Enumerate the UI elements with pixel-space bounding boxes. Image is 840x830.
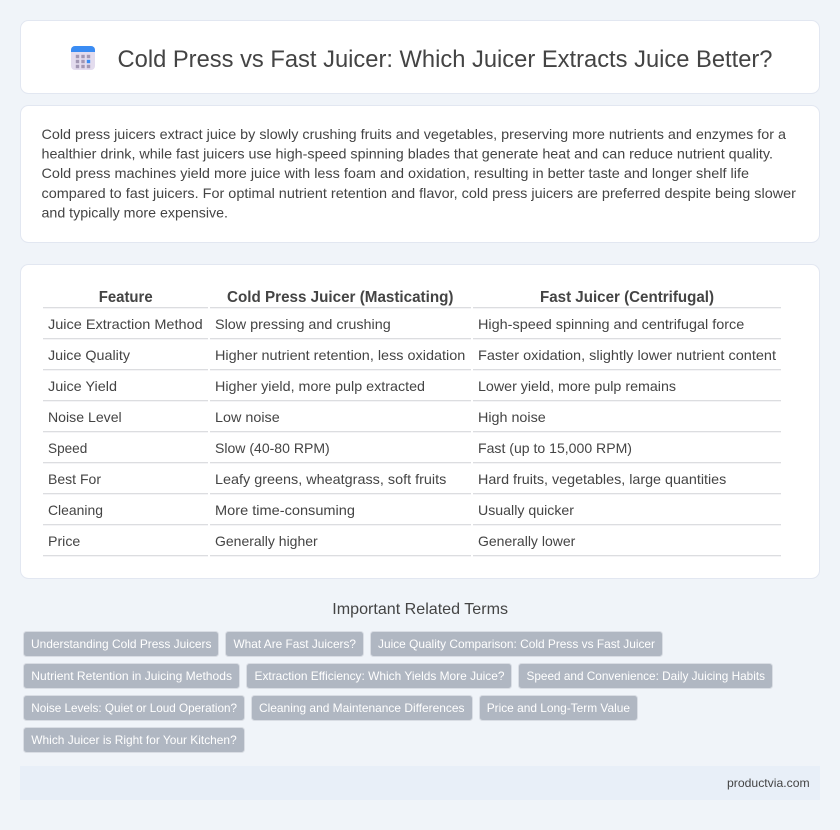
intro paragraph xyxy=(42,126,796,220)
row: best for xyxy=(43,471,781,494)
tag: which juicer is right xyxy=(24,728,244,752)
row: juice quality: Higher nutrient retention, less oxidation xyxy=(215,347,465,363)
row: noise level: Noise Level xyxy=(48,409,122,425)
intro paragraph: healthier drink, while fast juicers use high-speed spinning blades that generate heat and can reduce nutrient quality. xyxy=(42,146,773,162)
panel: header xyxy=(20,20,820,94)
row: noise level: Low noise xyxy=(215,409,280,425)
table header row xyxy=(43,289,781,308)
row: juice extraction method xyxy=(43,316,781,339)
panel: comparison table xyxy=(20,264,820,578)
icon: calendar xyxy=(71,46,95,70)
footer source text: productvia.com xyxy=(727,776,810,790)
row: speed: Speed xyxy=(48,440,87,456)
tag: cleaning and maintenance xyxy=(252,696,472,720)
row: speed: Fast (up to 15,000 RPM) xyxy=(478,440,632,456)
row: juice extraction method: High-speed spinning and centrifugal force xyxy=(478,316,745,332)
row: price: Generally lower xyxy=(478,533,576,549)
tag: speed and convenience xyxy=(518,664,772,688)
row: juice quality xyxy=(43,347,781,370)
tag: speed and convenience: Speed and Convenience: Daily Juicing Habits xyxy=(526,669,765,683)
tag: noise levels: Noise Levels: Quiet or Loud Operation? xyxy=(31,701,237,715)
row: juice extraction method: Slow pressing and crushing xyxy=(215,316,391,332)
intro paragraph: Cold press machines yield more juice with less foam and oxidation, resulting in better taste and longer shelf life xyxy=(42,165,749,181)
tag: noise levels xyxy=(24,696,244,720)
row: juice extraction method: Juice Extraction Method xyxy=(48,316,203,332)
tag: juice quality comparison xyxy=(370,632,662,656)
tag: what are fast juicers xyxy=(226,632,364,656)
row: juice quality: Juice Quality xyxy=(48,347,130,363)
row: best for: Leafy greens, wheatgrass, soft fruits xyxy=(215,471,446,487)
row: juice quality: Faster oxidation, slightly lower nutrient content xyxy=(478,347,776,363)
tag: nutrient retention: Nutrient Retention in Juicing Methods xyxy=(31,669,232,683)
tag: price and long-term value: Price and Long-Term Value xyxy=(487,701,630,715)
related terms tags xyxy=(24,632,772,752)
row: speed: Slow (40-80 RPM) xyxy=(215,440,330,456)
heading: important related terms: Important Related Terms xyxy=(332,601,508,618)
tag: understanding cold press juicers: Understanding Cold Press Juicers xyxy=(31,637,212,651)
tag: which juicer is right: Which Juicer is Right for Your Kitchen? xyxy=(31,733,237,747)
tag: what are fast juicers: What Are Fast Juicers? xyxy=(234,637,356,651)
row: cleaning: More time-consuming xyxy=(215,502,355,518)
row: juice yield: Lower yield, more pulp remains xyxy=(478,378,676,394)
row: price: Price xyxy=(48,533,81,549)
tag: extraction efficiency xyxy=(246,664,512,688)
row: best for: Hard fruits, vegetables, large quantities xyxy=(478,471,726,487)
row: juice yield xyxy=(43,378,781,401)
row: juice yield: Juice Yield xyxy=(48,378,117,394)
intro paragraph: compared to fast juicers. For optimal nutrient retention and flavor, cold press juicers are preferred despite being slower xyxy=(42,185,796,201)
tag: juice quality comparison: Juice Quality Comparison: Cold Press vs Fast Juicer xyxy=(378,637,655,651)
table header row: Feature xyxy=(99,289,153,306)
tag: extraction efficiency: Extraction Efficiency: Which Yields More Juice? xyxy=(254,669,505,683)
row: noise level: High noise xyxy=(478,409,546,425)
title: Cold Press vs Fast Juicer: Which Juicer Extracts Juice Better? xyxy=(118,46,772,73)
panel: introduction xyxy=(20,106,820,242)
intro paragraph: Cold press juicers extract juice by slowly crushing fruits and vegetables, preserving more nutrients and enzymes for a xyxy=(42,126,786,142)
row: price: Generally higher xyxy=(215,533,318,549)
tag: price and long-term value xyxy=(480,696,638,720)
intro paragraph: and typically more expensive. xyxy=(42,204,228,220)
tag: nutrient retention xyxy=(24,664,240,688)
row: cleaning: Cleaning xyxy=(48,502,103,518)
row: best for: Best For xyxy=(48,471,101,487)
table header row: Cold Press Juicer (Masticating) xyxy=(227,289,454,306)
row: price xyxy=(43,533,781,556)
footer xyxy=(20,766,820,800)
row: cleaning: Usually quicker xyxy=(478,502,574,518)
tag: cleaning and maintenance: Cleaning and Maintenance Differences xyxy=(259,701,464,715)
row: speed xyxy=(43,440,781,463)
row: noise level xyxy=(43,409,781,432)
tag: understanding cold press juicers xyxy=(24,632,218,656)
table header row: Fast Juicer (Centrifugal) xyxy=(540,289,714,306)
row: cleaning xyxy=(43,502,781,525)
row: juice yield: Higher yield, more pulp extracted xyxy=(215,378,425,394)
